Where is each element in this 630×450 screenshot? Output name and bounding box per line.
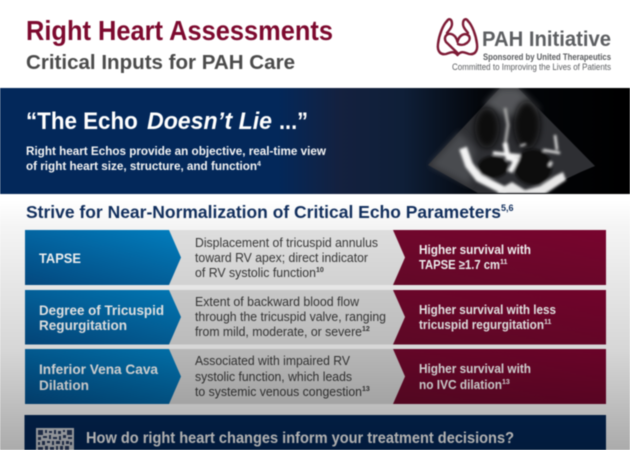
row: tricuspid regurgitation <box>25 290 606 344</box>
panel: echo banner <box>0 88 630 200</box>
subtitle: Critical Inputs for PAH Care <box>26 52 295 74</box>
red outcome chevron: Higher survival with <box>419 361 531 376</box>
banner quote: “The Echo <box>26 108 144 135</box>
description: 12 <box>362 326 370 333</box>
description: of RV systolic function <box>195 265 316 280</box>
red outcome chevron: 11 <box>500 259 508 266</box>
blue label chevron: Dilation <box>39 377 89 393</box>
icon: echocardiogram image <box>428 88 595 200</box>
red outcome chevron: no IVC dilation <box>419 377 502 392</box>
banner description: 4 <box>257 161 261 168</box>
row: inferior vena cava <box>25 349 606 404</box>
red outcome chevron: 13 <box>502 379 510 386</box>
description: Extent of backward blood flow <box>195 294 360 309</box>
banner quote: Doesn’t Lie <box>147 108 272 135</box>
blue label chevron <box>25 230 181 285</box>
description: Displacement of tricuspid annulus <box>195 235 378 250</box>
red outcome chevron <box>393 349 606 404</box>
red outcome chevron: Higher survival with <box>419 242 531 257</box>
red outcome chevron: TAPSE ≥1.7 cm <box>419 257 500 272</box>
banner description: Right heart Echos provide an objective, real-time view <box>26 144 327 158</box>
description: 13 <box>362 386 370 393</box>
banner quote: ...” <box>279 108 308 135</box>
red outcome chevron <box>393 290 606 344</box>
blue label chevron <box>25 290 181 344</box>
red outcome chevron: tricuspid regurgitation <box>419 317 544 332</box>
description: 10 <box>316 267 324 274</box>
description <box>195 235 378 280</box>
description <box>195 294 386 339</box>
middle panel <box>160 230 405 285</box>
description: systolic function, which leads <box>195 369 352 384</box>
description: from mild, moderate, or severe <box>195 324 362 339</box>
section heading: 5,6 <box>501 203 514 213</box>
description: through the tricuspid valve, ranging <box>195 309 386 324</box>
logo wordmark: PAH Initiative <box>482 28 611 51</box>
banner description <box>26 144 327 173</box>
banner description: of right heart size, structure, and function <box>26 159 257 173</box>
blue label chevron: TAPSE <box>39 250 81 266</box>
logo sponsor line: Sponsored by United Therapeutics <box>483 52 611 62</box>
section heading: Strive for Near-Normalization of Critical Echo Parameters <box>26 202 501 222</box>
middle panel <box>160 349 405 404</box>
row: TAPSE <box>25 230 606 285</box>
blue label chevron: Regurgitation <box>39 317 127 333</box>
description: toward RV apex; direct indicator <box>195 250 369 265</box>
logo tagline: Committed to Improving the Lives of Patients <box>452 62 611 72</box>
middle panel <box>160 290 405 344</box>
panel: call to action <box>24 415 606 450</box>
blue label chevron <box>25 349 181 404</box>
blue label chevron: Degree of Tricuspid <box>39 302 164 318</box>
icon: QR code <box>36 428 74 450</box>
red outcome chevron <box>393 230 606 285</box>
red outcome chevron: 11 <box>544 319 552 326</box>
description <box>195 353 370 399</box>
logo: PAH Initiative <box>438 19 611 72</box>
icon: lungs and heart <box>438 19 477 55</box>
question text: How do right heart changes inform your treatment decisions? <box>86 430 514 447</box>
title: Right Heart Assessments <box>26 15 333 46</box>
red outcome chevron: Higher survival with less <box>419 302 556 317</box>
description: to systemic venous congestion <box>195 384 362 399</box>
blue label chevron: Inferior Vena Cava <box>39 361 158 377</box>
description: Associated with impaired RV <box>195 353 350 368</box>
